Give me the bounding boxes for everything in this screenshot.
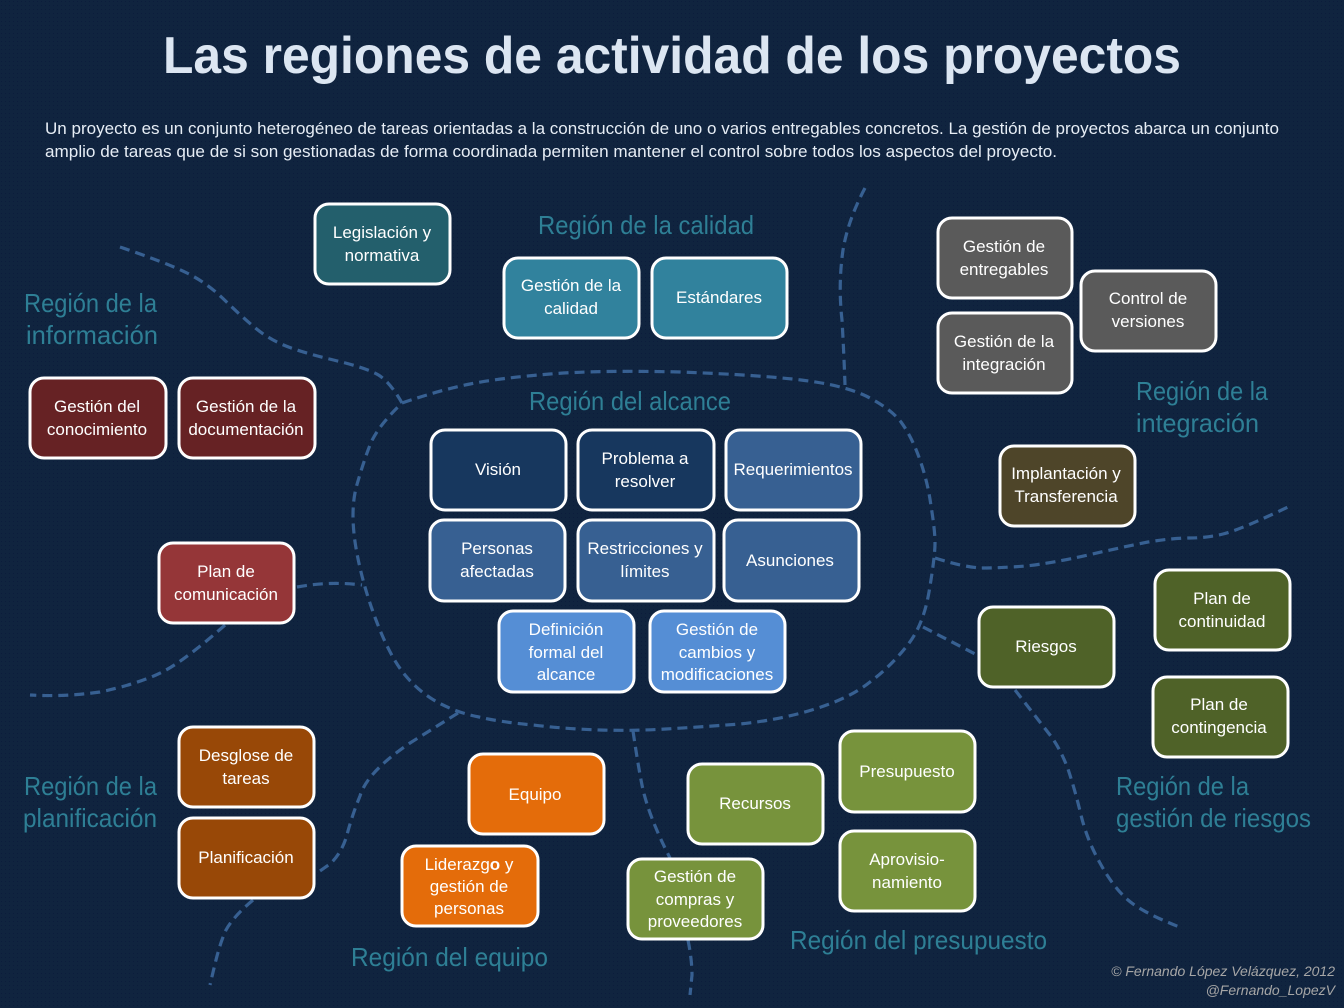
box: Definición formal del alcance: [499, 611, 634, 692]
intro text: [45, 119, 1279, 161]
region label: información: [24, 288, 158, 350]
box: Restricciones y límites: límites: [620, 562, 670, 581]
box: Gestión de la documentación: documentación: [188, 420, 304, 439]
region label: riesgos: Región de la: [1116, 771, 1249, 801]
box: Gestión de compras y proveedores: compras y: [656, 890, 735, 909]
box: Gestión de la calidad: [504, 258, 639, 338]
box: Personas afectadas: Personas: [461, 539, 533, 558]
region label: alcance: Región del alcance: [529, 386, 731, 416]
box: Restricciones y límites: Restricciones y: [587, 539, 703, 558]
box: Plan de comunicación: [159, 543, 294, 623]
region label: información: información: [26, 320, 158, 350]
box: Personas afectadas: afectadas: [460, 562, 534, 581]
box: Gestión de entregables: entregables: [960, 260, 1048, 279]
box: Desglose de tareas: Desglose de: [199, 746, 293, 765]
box: Implantación y Transferencia: [1000, 446, 1135, 526]
box: Problema a resolver: Problema a: [602, 449, 689, 468]
box: Restricciones y límites: [578, 520, 714, 601]
box: Recursos: [688, 764, 823, 844]
box: Estándares: Estándares: [676, 288, 762, 307]
box: Gestión de la integración: integración: [962, 355, 1046, 374]
region label: riesgos: [1116, 771, 1311, 833]
box: Liderazgo y gestión de personas: [402, 846, 538, 926]
box: Estándares: [652, 258, 787, 338]
box: Equipo: [469, 754, 604, 834]
intro text: amplio de tareas que de si son gestionadas de forma coordinada permiten mantener el control sobre todos los aspectos del proyecto.: [45, 142, 1057, 161]
box: Implantación y Transferencia: Transferencia: [1014, 487, 1118, 506]
box: Gestión de cambios y modificaciones: [650, 611, 785, 692]
box: Gestión de cambios y modificaciones: cambios y: [679, 643, 756, 662]
box: Definición formal del alcance: Definición: [529, 620, 603, 639]
box: Gestión de la documentación: [179, 378, 315, 458]
box: Gestión de la calidad: calidad: [544, 299, 598, 318]
box: Gestión del conocimiento: [30, 378, 166, 458]
box: Aprovisionamiento: namiento: [872, 873, 942, 892]
intro text: Un proyecto es un conjunto heterogéneo de tareas orientadas a la construcción de uno o varios entregables concretos. La gestión de proyectos abarca un conjunto: [45, 119, 1279, 138]
region label: calidad: Región de la calidad: [538, 210, 754, 240]
box: Legislación y normativa: normativa: [345, 246, 420, 265]
box: Gestión de cambios y modificaciones: Gestión de: [676, 620, 758, 639]
box: Plan de continuidad: continuidad: [1179, 612, 1265, 631]
box: Control de versiones: [1081, 271, 1216, 351]
box: Desglose de tareas: tareas: [222, 769, 270, 788]
title: Las regiones de actividad de los proyectos: [163, 27, 1181, 85]
box: Aprovisionamiento: [840, 831, 975, 911]
box: Control de versiones: versiones: [1112, 312, 1184, 331]
box: Asunciones: [724, 520, 859, 601]
box: Gestión de la documentación: Gestión de la: [196, 397, 297, 416]
region label: planificación: planificación: [23, 803, 157, 833]
region label: equipo: Región del equipo: [351, 942, 548, 972]
box: Problema a resolver: resolver: [615, 472, 676, 491]
box: Gestión de compras y proveedores: proveedores: [648, 912, 742, 931]
box: Plan de comunicación: comunicación: [174, 585, 278, 604]
region label: riesgos: gestión de riesgos: [1116, 803, 1311, 833]
credit: © Fernando López Velázquez, 2012: [1111, 963, 1335, 979]
box: Liderazgo y gestión de personas: Liderazgo y: [425, 855, 514, 874]
box: Plan de comunicación: Plan de: [197, 562, 255, 581]
region label: integración: [1136, 376, 1268, 438]
box: Plan de contingencia: Plan de: [1190, 695, 1248, 714]
box: Equipo: Equipo: [509, 785, 561, 804]
box: Aprovisionamiento: Aprovisio-: [869, 850, 945, 869]
box: Desglose de tareas: [179, 727, 314, 807]
box: Riesgos: Riesgos: [1015, 637, 1077, 656]
box: Implantación y Transferencia: Implantación y: [1011, 464, 1121, 483]
box: Gestión de entregables: [938, 218, 1072, 298]
box: Requerimientos: [726, 430, 861, 510]
box: Gestión de la integración: Gestión de la: [954, 332, 1055, 351]
box: Gestión de cambios y modificaciones: modificaciones: [661, 665, 773, 684]
region label: presupuesto: Región del presupuesto: [790, 925, 1047, 955]
box: Problema a resolver: [578, 430, 714, 510]
box: Gestión de compras y proveedores: Gestión de: [654, 867, 736, 886]
box: Definición formal del alcance: alcance: [537, 665, 595, 684]
box: Plan de contingencia: contingencia: [1171, 718, 1267, 737]
box: Planificación: Planificación: [198, 848, 294, 867]
credit: [1111, 963, 1337, 998]
box: Presupuesto: [840, 731, 975, 812]
box: Gestión del conocimiento: Gestión del: [54, 397, 140, 416]
box: Gestión de entregables: Gestión de: [963, 237, 1045, 256]
box: Plan de continuidad: Plan de: [1193, 589, 1251, 608]
box: Plan de continuidad: [1155, 570, 1290, 650]
box: Requerimientos: Requerimientos: [733, 460, 853, 479]
box: Liderazgo y gestión de personas: personas: [434, 899, 504, 918]
box: Liderazgo y gestión de personas: gestión de: [430, 877, 508, 896]
box: Control de versiones: Control de: [1109, 289, 1187, 308]
box: Gestión de la calidad: Gestión de la: [521, 276, 622, 295]
box: Asunciones: Asunciones: [746, 551, 834, 570]
box: Recursos: Recursos: [719, 794, 791, 813]
box: Riesgos: [979, 607, 1114, 687]
box: Legislación y normativa: Legislación y: [333, 223, 432, 242]
box: Gestión de compras y proveedores: [628, 859, 763, 939]
box: Gestión de la integración: [938, 313, 1072, 393]
box: Plan de contingencia: [1153, 677, 1288, 757]
box: Legislación y normativa: [315, 204, 450, 284]
box: Personas afectadas: [430, 520, 565, 601]
box: Presupuesto: Presupuesto: [859, 762, 955, 781]
box: Gestión del conocimiento: conocimiento: [47, 420, 147, 439]
region label: integración: integración: [1136, 408, 1259, 438]
region label: planificación: [23, 771, 157, 833]
region label: planificación: Región de la: [24, 771, 157, 801]
region label: integración: Región de la: [1136, 376, 1268, 406]
box: Definición formal del alcance: formal del: [529, 643, 603, 662]
box: Visión: [431, 430, 566, 510]
dashed region boundaries: [30, 188, 1290, 995]
box: Visión: Visión: [475, 460, 521, 479]
box: Planificación: [179, 818, 314, 898]
credit: @Fernando_LopezV: [1206, 982, 1337, 998]
region label: información: Región de la: [24, 288, 157, 318]
